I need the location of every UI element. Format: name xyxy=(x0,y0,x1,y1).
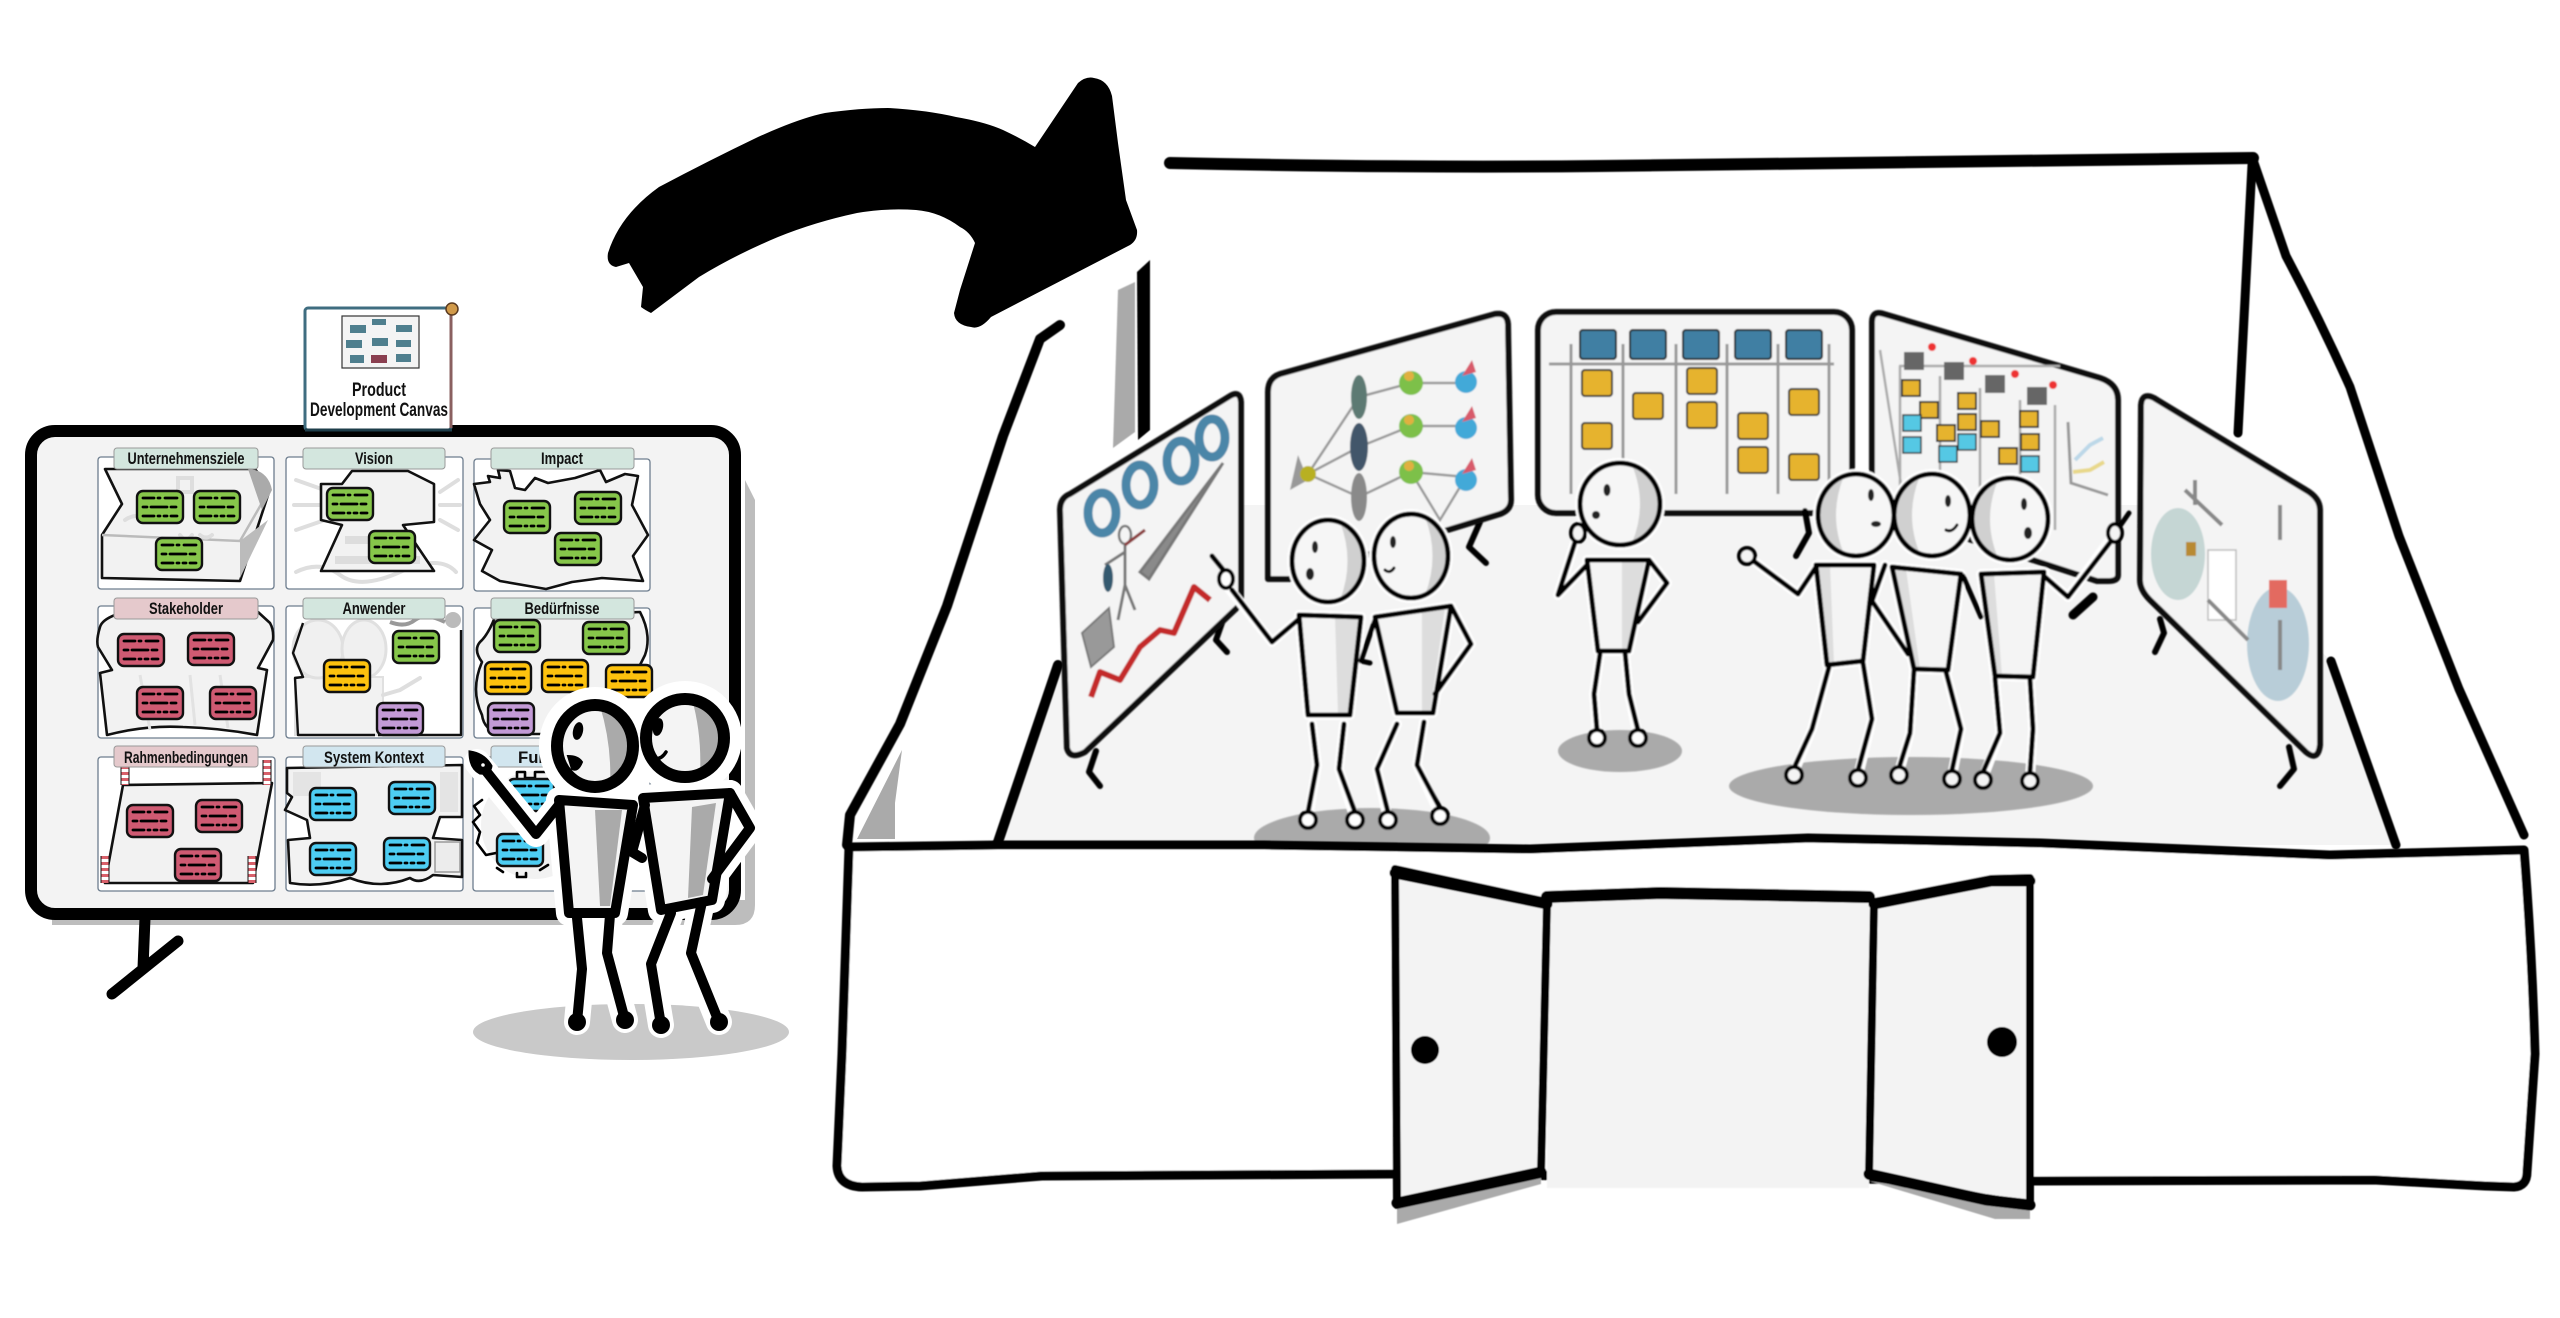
canvas cell: Impact xyxy=(474,448,650,591)
canvas cell: System Kontext xyxy=(285,746,463,891)
white halo xyxy=(477,699,750,1025)
canvas cell: Vision xyxy=(286,448,463,589)
door opening xyxy=(1547,893,1869,1188)
room contents xyxy=(1060,312,2320,868)
board: planning grid xyxy=(1872,313,2118,581)
person left xyxy=(470,705,636,1031)
board: kanban xyxy=(1538,312,1852,556)
canvas cell: Anwender: Anwender xyxy=(342,599,406,618)
card: Product Development Canvas xyxy=(305,303,458,430)
canvas cell: Stakeholder: Stakeholder xyxy=(149,599,223,618)
board stand xyxy=(112,918,178,994)
board: network map xyxy=(1268,314,1511,579)
backlog headers xyxy=(1580,330,1822,359)
canvas cell: Rahmenbedingungen: Rahmenbedingungen xyxy=(124,748,248,767)
canvas cell: Rahmenbedingungen xyxy=(98,746,275,891)
canvas cell: Anwender xyxy=(286,598,463,738)
card: Product Development Canvas: Product xyxy=(352,380,407,401)
building xyxy=(837,158,2535,1224)
front wall and entrance xyxy=(837,838,2535,1224)
right door xyxy=(1869,878,2030,1205)
canvas cell: Bedürfnisse xyxy=(474,598,652,738)
floor shadow xyxy=(473,1004,789,1060)
card: Product Development Canvas: Development Canvas xyxy=(310,400,448,421)
people pointing at left boards xyxy=(1212,514,1471,828)
arrow: canvas to room xyxy=(608,78,1137,328)
front wall xyxy=(837,838,2535,1187)
door shadows xyxy=(1869,1181,2030,1219)
board frame xyxy=(31,431,735,914)
mini canvas xyxy=(342,316,419,368)
figures at the canvas xyxy=(470,699,789,1060)
panel: canvas board xyxy=(31,303,755,994)
board: roadmap chart xyxy=(1060,394,1241,786)
corner shading xyxy=(857,750,902,839)
canvas cell: Impact: Impact xyxy=(541,449,583,468)
board: system diagram xyxy=(2140,396,2320,786)
tiny stick figure xyxy=(1103,526,1145,620)
canvas cell: Bedürfnisse: Bedürfnisse xyxy=(524,599,600,618)
floor shadows xyxy=(1254,808,1490,868)
canvas cell: Stakeholder xyxy=(97,598,274,738)
board shadow xyxy=(52,480,755,925)
floor xyxy=(997,505,2396,845)
left door xyxy=(1395,869,1547,1205)
canvas cell: Unternehmensziele xyxy=(98,448,274,589)
canvas cell: Funktionen: Funktionen xyxy=(518,748,608,767)
yellow tasks xyxy=(1582,368,1819,480)
person right xyxy=(632,699,750,1034)
group of three people xyxy=(1739,474,2129,789)
canvas cell: Funktionen xyxy=(473,746,650,891)
person thinking xyxy=(1558,463,1667,746)
canvas cell: Vision: Vision xyxy=(355,449,393,468)
back walls and roof lines xyxy=(847,158,2524,845)
canvas cell: Unternehmensziele: Unternehmensziele xyxy=(128,449,244,468)
canvas cell: System Kontext: System Kontext xyxy=(324,748,424,767)
